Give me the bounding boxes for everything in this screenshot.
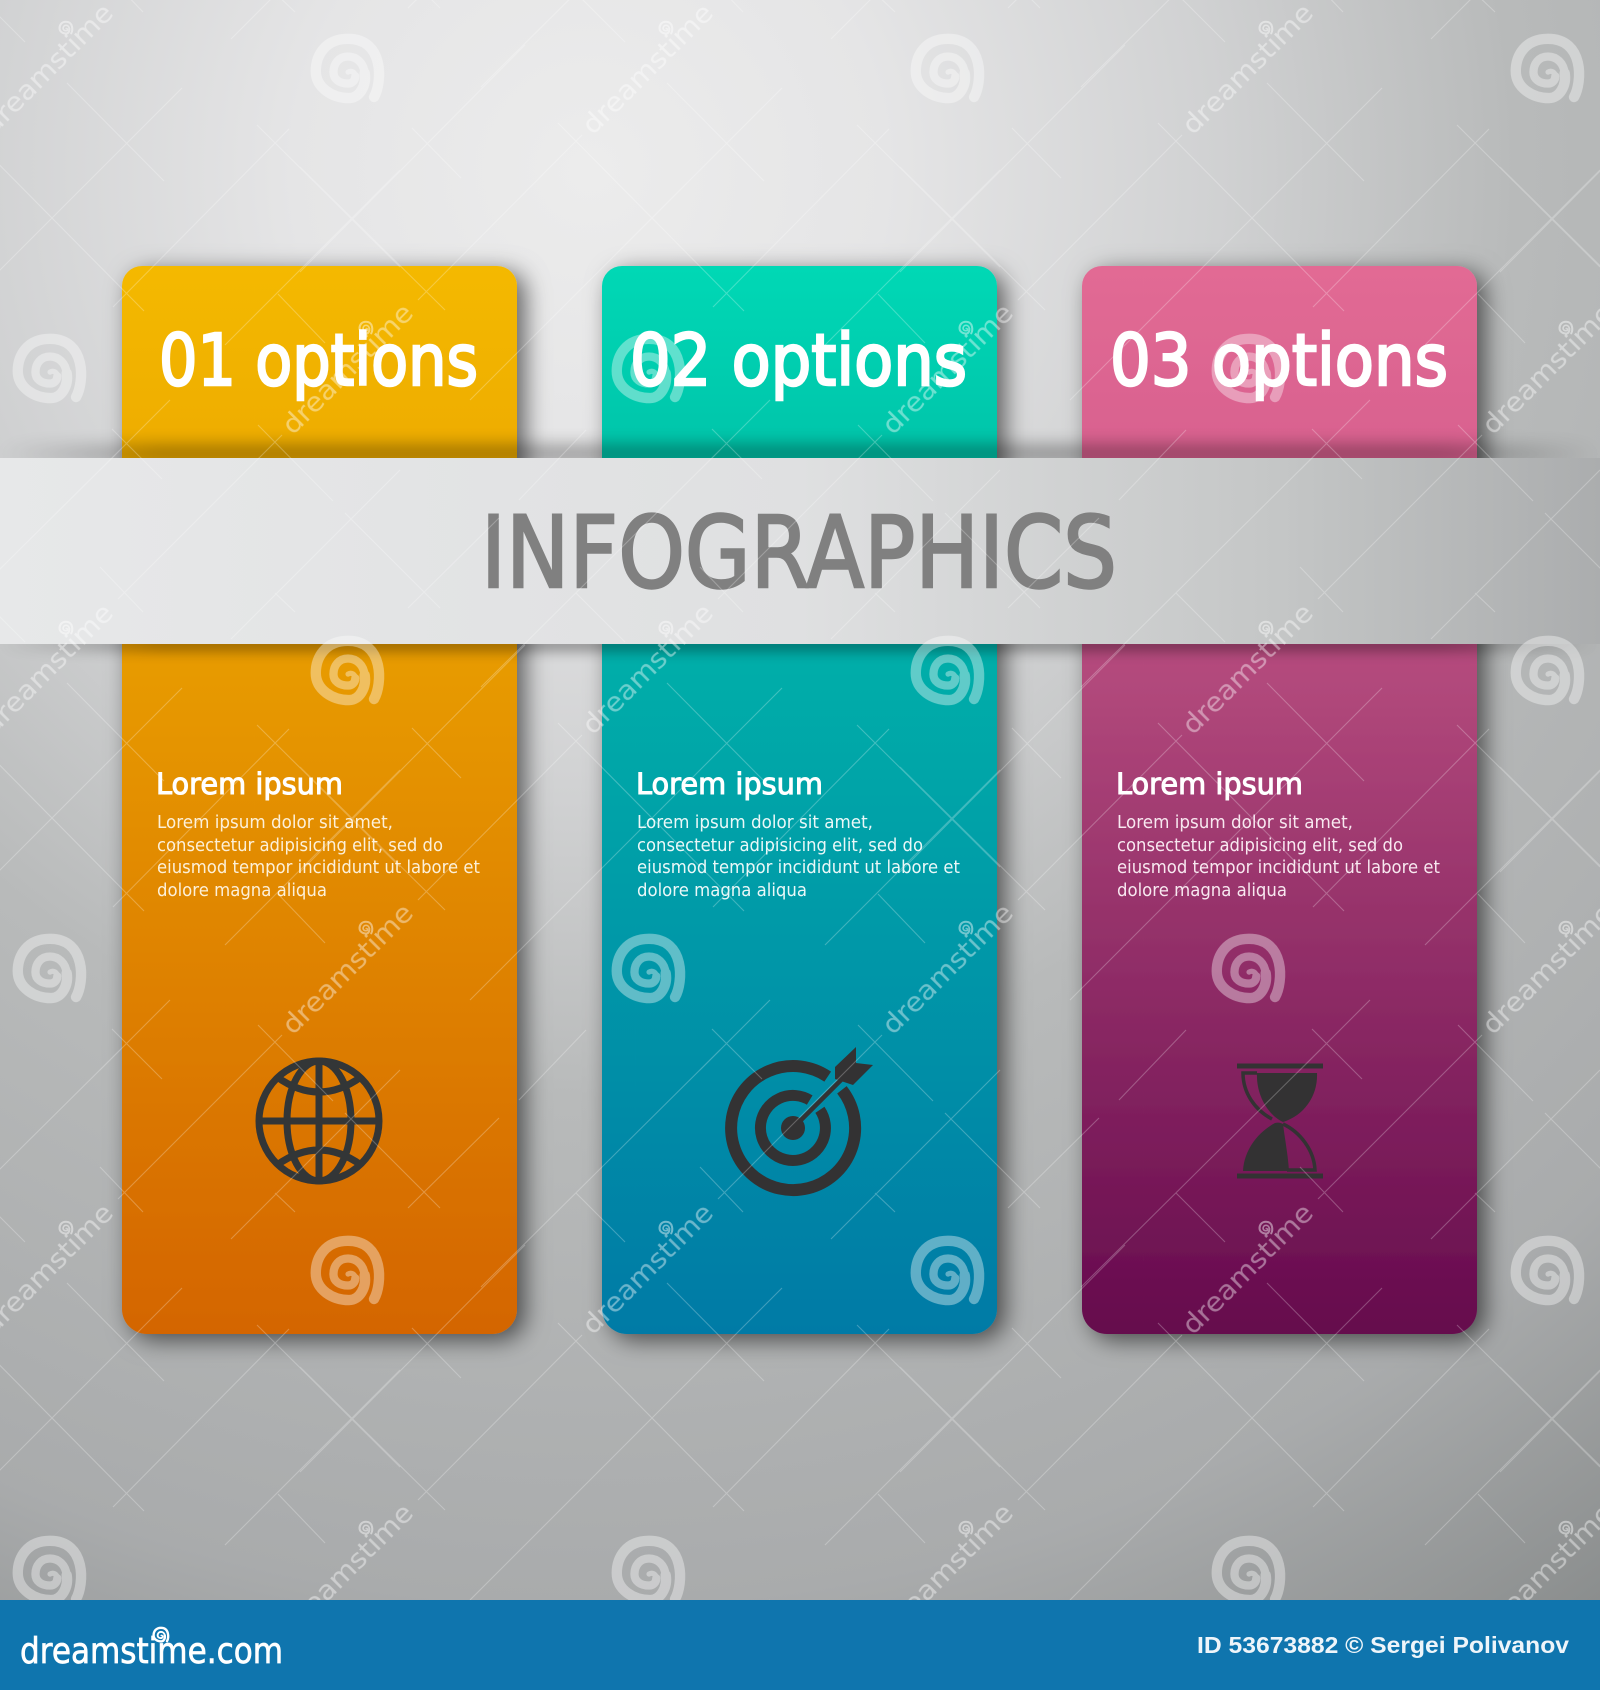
- panel: column 02 card: [602, 266, 997, 1334]
- text block: column 01: [156, 767, 480, 901]
- body copy: [1117, 812, 1440, 901]
- body copy: consectetur adipisicing elit, sed do: [637, 835, 923, 856]
- banner band: [0, 458, 1600, 644]
- subheading: Lorem ipsum: [636, 767, 823, 801]
- watermark wordmarks: dreamstime: [1176, 0, 1320, 141]
- watermark wordmarks: dreamstime: [1176, 1197, 1320, 1341]
- watermark wordmarks: dreamstime: [576, 1197, 720, 1341]
- footer credit: ID 53673882 © Sergei Polivanov: [1197, 1632, 1569, 1658]
- text block: column 03: [1116, 767, 1440, 901]
- band shadow bottom: [0, 638, 1600, 650]
- watermark wordmarks: dreamstime: [1176, 597, 1320, 741]
- panel: column 03 card: [1082, 266, 1477, 1334]
- body copy: Lorem ipsum dolor sit amet,: [637, 812, 873, 833]
- body copy: Lorem ipsum dolor sit amet,: [157, 812, 393, 833]
- body copy: dolore magna aliqua: [637, 880, 807, 901]
- text block: column 02: [636, 767, 960, 901]
- watermark wordmarks: dreamstime: [276, 1497, 420, 1641]
- watermark wordmarks: dreamstime: [276, 897, 420, 1041]
- icon: globe: [259, 1061, 379, 1181]
- footer logo text: dreamstime.com: [20, 1631, 283, 1672]
- body copy: dolore magna aliqua: [157, 880, 327, 901]
- watermark wordmarks: dreamstime: [576, 597, 720, 741]
- body copy: [157, 812, 480, 901]
- body copy: Lorem ipsum dolor sit amet,: [1117, 812, 1353, 833]
- body copy: eiusmod tempor incididunt ut labore et: [637, 857, 960, 878]
- watermark wordmarks: dreamstime: [876, 897, 1020, 1041]
- icon: hourglass: [1237, 1064, 1323, 1178]
- body copy: consectetur adipisicing elit, sed do: [157, 835, 443, 856]
- body copy: consectetur adipisicing elit, sed do: [1117, 835, 1403, 856]
- footer bar: [0, 1600, 1600, 1690]
- body copy: eiusmod tempor incididunt ut labore et: [1117, 857, 1440, 878]
- watermark wordmarks: dreamstime: [876, 297, 1020, 441]
- subheading: Lorem ipsum: [156, 767, 343, 801]
- watermark wordmarks: dreamstime: [276, 297, 420, 441]
- body copy: eiusmod tempor incididunt ut labore et: [157, 857, 480, 878]
- watermark wordmarks: dreamstime: [876, 1497, 1020, 1641]
- heading: 01 options: 01 options: [159, 319, 478, 402]
- title: INFOGRAPHICS: INFOGRAPHICS: [481, 496, 1117, 611]
- band shadow top: [0, 447, 1600, 461]
- body copy: dolore magna aliqua: [1117, 880, 1287, 901]
- heading: 02 options: 02 options: [630, 319, 967, 402]
- watermark wordmarks: dreamstime: [576, 0, 720, 141]
- icon: target with arrow: [731, 1047, 873, 1190]
- heading: 03 options: 03 options: [1110, 319, 1448, 402]
- subheading: Lorem ipsum: [1116, 767, 1303, 801]
- footer logo swirl: [154, 1628, 168, 1641]
- body copy: [637, 812, 960, 901]
- panel: column 01 card: [122, 266, 517, 1334]
